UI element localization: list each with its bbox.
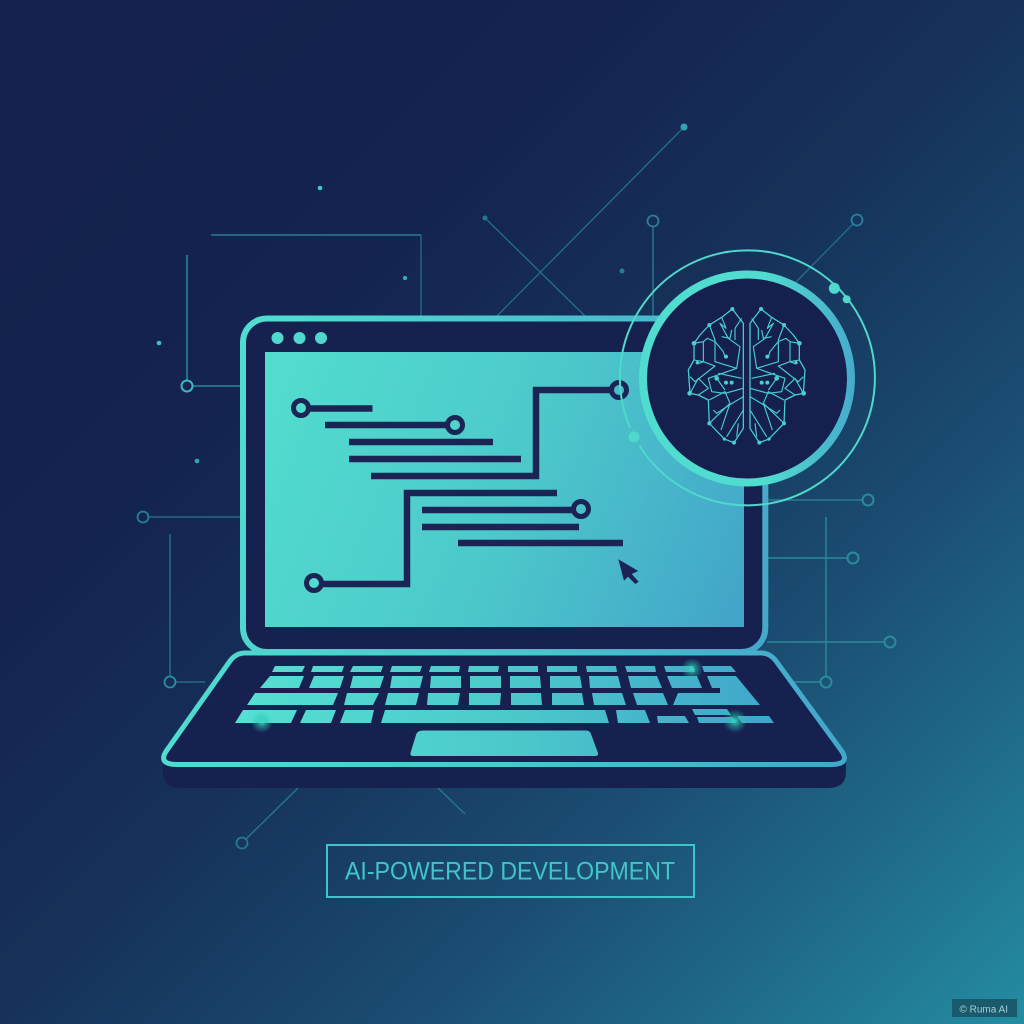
outer orbit ring — [620, 250, 875, 505]
laptop — [163, 318, 846, 788]
brain disc — [643, 274, 851, 482]
brain circuit icon — [687, 307, 806, 445]
circuit lines behind laptop — [138, 127, 896, 848]
code lines and circuit traces — [294, 382, 626, 590]
laptop base shadow — [163, 758, 846, 788]
brain badge — [620, 250, 875, 505]
keyboard — [235, 666, 774, 723]
window control dots — [272, 332, 327, 344]
laptop screen — [265, 352, 744, 627]
watermark: © Ruma AI — [960, 1004, 1008, 1016]
cursor arrow — [618, 559, 639, 584]
orbit dots — [628, 283, 851, 442]
title label — [327, 845, 694, 897]
laptop base — [164, 653, 844, 764]
laptop lid — [243, 318, 765, 652]
title label: AI-POWERED DEVELOPMENT — [345, 858, 675, 886]
left hemisphere — [687, 307, 743, 445]
watermark — [952, 999, 1017, 1017]
touchpad — [410, 730, 598, 756]
scattered dots — [157, 124, 687, 463]
right hemisphere — [750, 307, 806, 445]
key glows — [251, 658, 747, 733]
